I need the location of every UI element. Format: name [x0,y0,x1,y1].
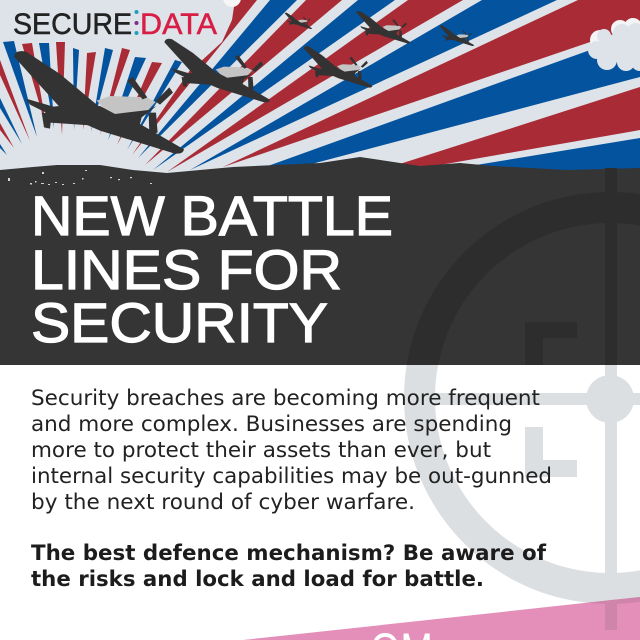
title [31,184,393,354]
crosshair on pink [586,597,640,630]
crosshair on dark [412,168,640,351]
cloud top [223,0,241,7]
pink band [243,597,640,640]
intro text: by the next round of cyber warfare. [31,490,415,515]
bold call to action [31,541,547,591]
logo backdrop [0,0,235,64]
mountain speckles [8,170,152,185]
plane medium [164,39,270,102]
intro text: Security breaches are becoming more frequent [31,386,540,411]
plane formation right [304,46,372,88]
intro text: more to protect their assets than ever, but [31,438,491,463]
title panel [0,157,640,365]
plane large [14,51,184,154]
plane smallest [285,13,312,29]
logo: SECURE [13,8,132,41]
intro text [31,386,552,515]
logo [13,8,217,41]
cloud right [588,18,640,71]
bold call to action: The best defence mechanism? Be aware of [31,541,547,565]
background sky [0,0,640,180]
plane small [440,25,474,46]
bold call to action: the risks and lock and load for battle. [31,567,484,591]
crosshair on white [404,365,640,602]
intro text: internal security capabilities may be out-gunned [31,464,552,489]
small ray fan [0,41,182,155]
plane upper [356,11,410,44]
sunburst stripes [132,0,640,183]
title: NEW BATTLE [31,184,393,247]
intro text: and more complex. Businesses are spending [31,412,512,437]
title: LINES FOR [31,238,342,301]
logo: DATA [140,8,217,41]
title: SECURITY [31,291,328,354]
